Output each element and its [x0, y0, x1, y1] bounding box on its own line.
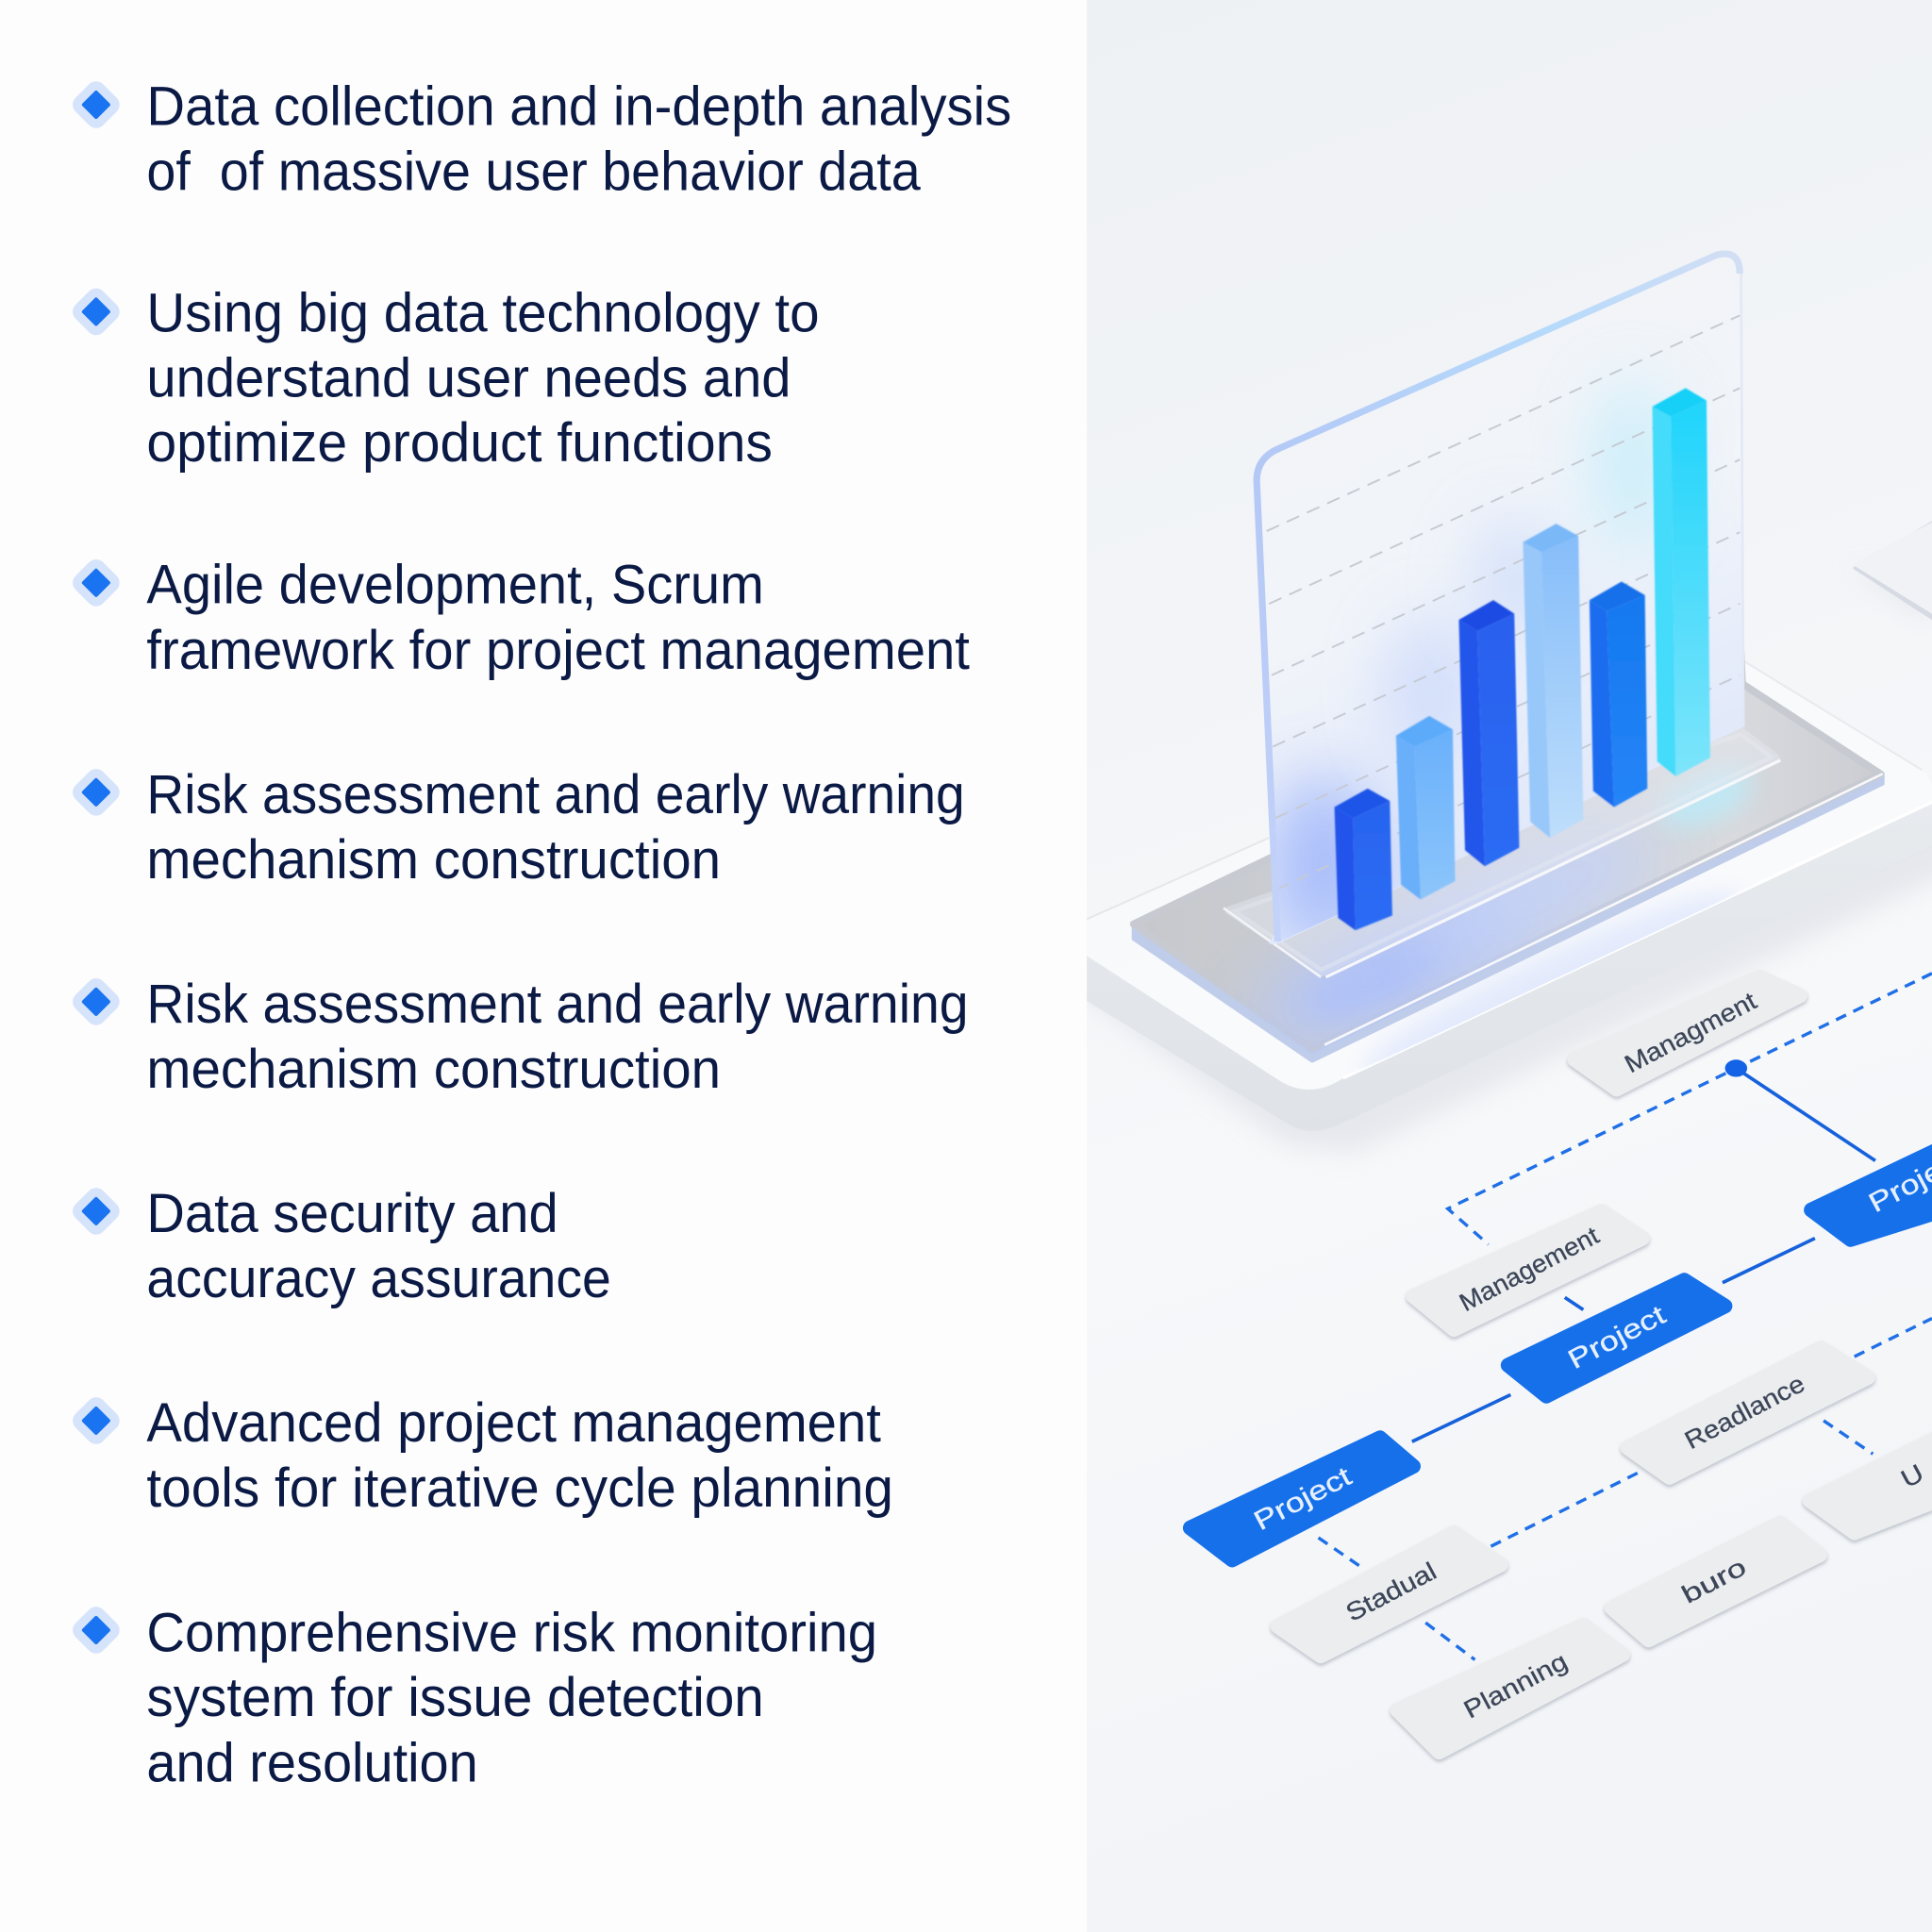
item 3: Agile development, Scrum — [146, 555, 764, 616]
card: Planning: Planning — [1459, 1648, 1573, 1724]
bar 2 — [1396, 716, 1456, 899]
flow diagram — [1191, 974, 1932, 1752]
item 3 — [83, 555, 970, 681]
item 8: Comprehensive risk monitoring — [146, 1603, 877, 1664]
card: Readlance — [1627, 1348, 1868, 1477]
isometric illustration — [1072, 254, 1932, 1752]
item 8: and resolution — [146, 1732, 478, 1793]
item 3: framework for project management — [146, 620, 970, 681]
card: Project left — [1191, 1438, 1413, 1560]
bar 5 — [1590, 581, 1647, 808]
card: Project right — [1811, 1134, 1932, 1240]
item 7 — [83, 1392, 893, 1519]
connector node — [1725, 1059, 1747, 1077]
card: Project center: Project — [1563, 1299, 1671, 1374]
card: Managment top: Managment — [1621, 988, 1761, 1078]
item 2: Using big data technology to — [146, 283, 820, 344]
card: Management middle — [1413, 1211, 1642, 1329]
right panel background — [1087, 0, 1932, 1932]
card: U — [1810, 1421, 1932, 1533]
card: buro — [1611, 1523, 1820, 1640]
bar 3 — [1458, 600, 1519, 866]
item 2: optimize product functions — [146, 412, 773, 474]
top-right partial slab — [1848, 523, 1932, 623]
item 1: of of massive user behavior data — [146, 142, 921, 203]
card: Project center — [1508, 1280, 1725, 1396]
item 1: Data collection and in-depth analysis — [146, 75, 1011, 137]
left panel background — [0, 0, 1087, 1932]
card: Managment top — [1574, 977, 1800, 1090]
card: Stadual — [1277, 1533, 1501, 1656]
item 8: system for issue detection — [146, 1667, 764, 1728]
card: U: U — [1897, 1459, 1928, 1493]
bullet list — [83, 75, 1011, 1793]
bar 6 — [1653, 388, 1710, 776]
item 4 — [83, 764, 965, 891]
item 2: understand user needs and — [146, 347, 791, 408]
item 4: mechanism construction — [146, 829, 721, 891]
card: buro: buro — [1677, 1553, 1751, 1609]
glass chart panel — [1257, 254, 1743, 949]
item 2 — [83, 283, 820, 474]
gridlines — [1267, 315, 1740, 890]
dashed and solid connectors — [1319, 974, 1932, 1659]
item 5 — [83, 974, 969, 1100]
item 8 — [83, 1603, 877, 1793]
inner glass plate — [1224, 732, 1780, 977]
item 4: Risk assessment and early warning — [146, 764, 965, 825]
item 7: tools for iterative cycle planning — [146, 1457, 893, 1519]
item 6: accuracy assurance — [146, 1248, 611, 1309]
item 6 — [83, 1183, 611, 1309]
item 1 — [83, 75, 1011, 203]
item 5: Risk assessment and early warning — [146, 974, 969, 1035]
silver tray with glow — [1134, 631, 1883, 1073]
card: Readlance: Readlance — [1680, 1370, 1809, 1455]
item 6: Data security and — [146, 1183, 558, 1244]
chart base slab — [1072, 625, 1932, 1152]
card: Planning — [1397, 1625, 1623, 1752]
bar 1 — [1335, 789, 1392, 930]
card: Stadual: Stadual — [1341, 1557, 1441, 1627]
card: Project left: Project — [1249, 1460, 1357, 1537]
item 5: mechanism construction — [146, 1039, 721, 1100]
card: Management middle: Management — [1455, 1222, 1604, 1317]
bar 4 — [1523, 524, 1583, 838]
item 7: Advanced project management — [146, 1392, 881, 1454]
